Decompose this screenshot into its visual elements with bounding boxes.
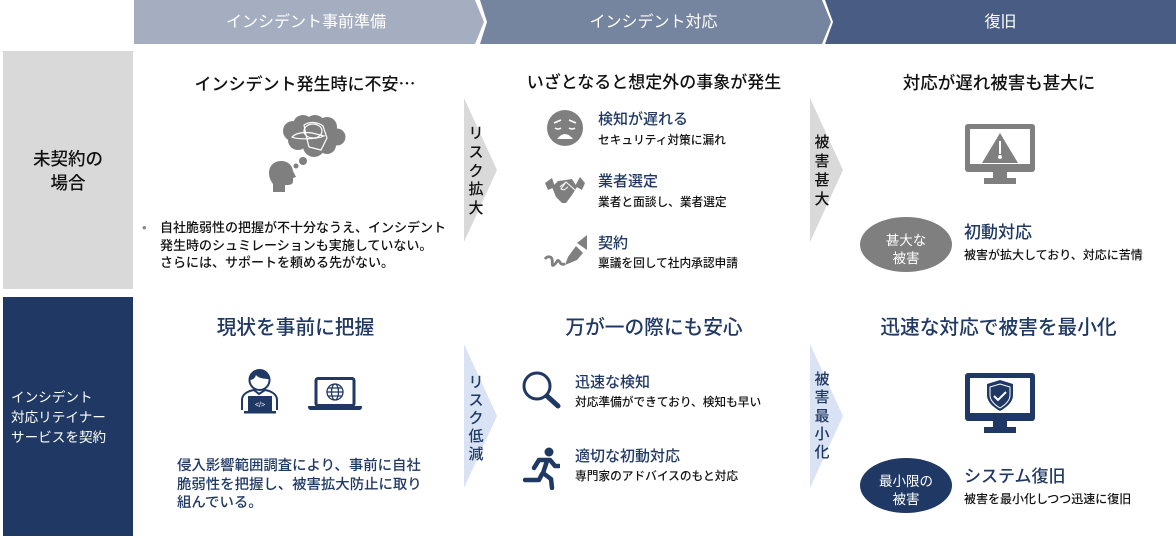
item: contract: 契約 [598, 235, 628, 252]
icon: pen signature [544, 235, 587, 267]
item: initial response: 初動対応 [964, 223, 1032, 242]
item: vendor selection: 業者と面談し、業者選定 [598, 196, 727, 209]
heading: anxiety at incident: インシデント発生時に不安… [194, 70, 416, 95]
heading: unexpected events: いざとなると想定外の事象が発生 [527, 73, 781, 92]
phase header bar: incident preparation [134, 0, 484, 44]
icon: engineer at laptop [241, 369, 278, 414]
row label: retainer contracted [3, 297, 133, 536]
item: late detection [598, 111, 726, 147]
item: rapid detection: 迅速な検知 [575, 374, 650, 391]
phase header bar: recovery: 復旧 [984, 14, 1016, 31]
item: rapid detection [575, 374, 761, 409]
item: system recovery: システム復旧 [964, 467, 1066, 486]
heading: minimize damage quickly: 迅速な対応で被害を最小化 [880, 317, 1117, 339]
text block: advance investigation [177, 458, 422, 511]
text block: bullet description: 自社脆弱性の把握が不十分なうえ、インシデント [160, 220, 446, 235]
item: late detection: 検知が遅れる [598, 111, 688, 128]
row label: not contracted: 未契約の [33, 149, 103, 169]
text block: bullet description: 発生時のシュミレーションも実施していない。 [160, 238, 432, 252]
icon: laptop with globe [308, 377, 362, 410]
arrow: damage minimized: 被害最小化 [814, 371, 830, 461]
icon: monitor with shield [965, 373, 1035, 433]
item: contract [598, 235, 738, 270]
icon: monitor with warning [965, 124, 1035, 184]
item: appropriate first response: 専門家のアドバイスのもと対応 [575, 470, 738, 483]
icon: worried thinking head [269, 115, 346, 192]
ellipse badge: minimal damage [860, 458, 952, 513]
ellipse badge: severe damage [860, 217, 952, 272]
item: rapid detection: 対応準備ができており、検知も早い [575, 396, 761, 409]
icon: sad face [547, 110, 583, 146]
ellipse badge: severe damage: 被害 [892, 251, 920, 266]
phase header bar: incident response: インシデント対応 [589, 14, 718, 31]
arrow: damage minimized [810, 344, 843, 488]
item: appropriate first response [575, 448, 738, 483]
arrow: risk reduction [464, 344, 497, 488]
text block: bullet description: • [142, 220, 147, 235]
item: system recovery: 被害を最小化しつつ迅速に復旧 [964, 492, 1131, 506]
item: appropriate first response: 適切な初動対応 [575, 448, 680, 465]
item: vendor selection [598, 173, 727, 209]
phase header bar: recovery [825, 0, 1176, 44]
arrow: severe damage [810, 98, 843, 242]
item: initial response: 被害が拡大しており、対応に苦情 [964, 248, 1143, 262]
ellipse badge: minimal damage: 最小限の [879, 474, 933, 489]
ellipse badge: severe damage: 甚大な [886, 233, 926, 248]
row label: not contracted: 場合 [50, 173, 86, 193]
arrow: severe damage: 被害甚大 [814, 134, 830, 208]
row label: retainer contracted: 対応リテイナー [11, 410, 106, 425]
text block: advance investigation: 侵入影響範囲調査により、事前に自社 [177, 458, 421, 474]
item: vendor selection: 業者選定 [598, 173, 658, 190]
icon: running person [523, 448, 560, 490]
arrow: risk expansion: リスク拡大 [468, 125, 484, 217]
heading: understand status beforehand: 現状を事前に把握 [217, 317, 374, 339]
heading: peace of mind: 万が一の際にも安心 [565, 317, 743, 339]
text block: bullet description [142, 220, 446, 270]
ellipse badge: minimal damage: 被害 [892, 492, 920, 507]
item: initial response [964, 223, 1143, 262]
heading: response delayed: 対応が遅れ被害も甚大に [903, 73, 1095, 93]
icon: engineer at laptop: </> [255, 402, 265, 409]
icon: handshake [545, 177, 585, 203]
icon: magnifying glass [522, 372, 560, 408]
phase header bar: incident response [480, 0, 831, 44]
phase header bar: incident preparation: インシデント事前準備 [226, 14, 386, 31]
row label: not contracted [3, 51, 133, 289]
row label: retainer contracted: サービスを契約 [11, 430, 106, 445]
text block: bullet description: さらには、サポートを頼める先がない。 [160, 255, 394, 270]
arrow: risk expansion [464, 98, 497, 242]
item: contract: 稟議を回して社内承認申請 [598, 257, 738, 270]
row label: retainer contracted: インシデント [11, 390, 93, 405]
arrow: risk reduction: リスク低減 [468, 374, 484, 463]
item: late detection: セキュリティ対策に漏れ [598, 134, 726, 147]
item: system recovery [964, 467, 1131, 506]
text block: advance investigation: 脆弱性を把握し、被害拡大防止に取り [177, 477, 422, 493]
text block: advance investigation: 組んでいる。 [177, 495, 263, 511]
